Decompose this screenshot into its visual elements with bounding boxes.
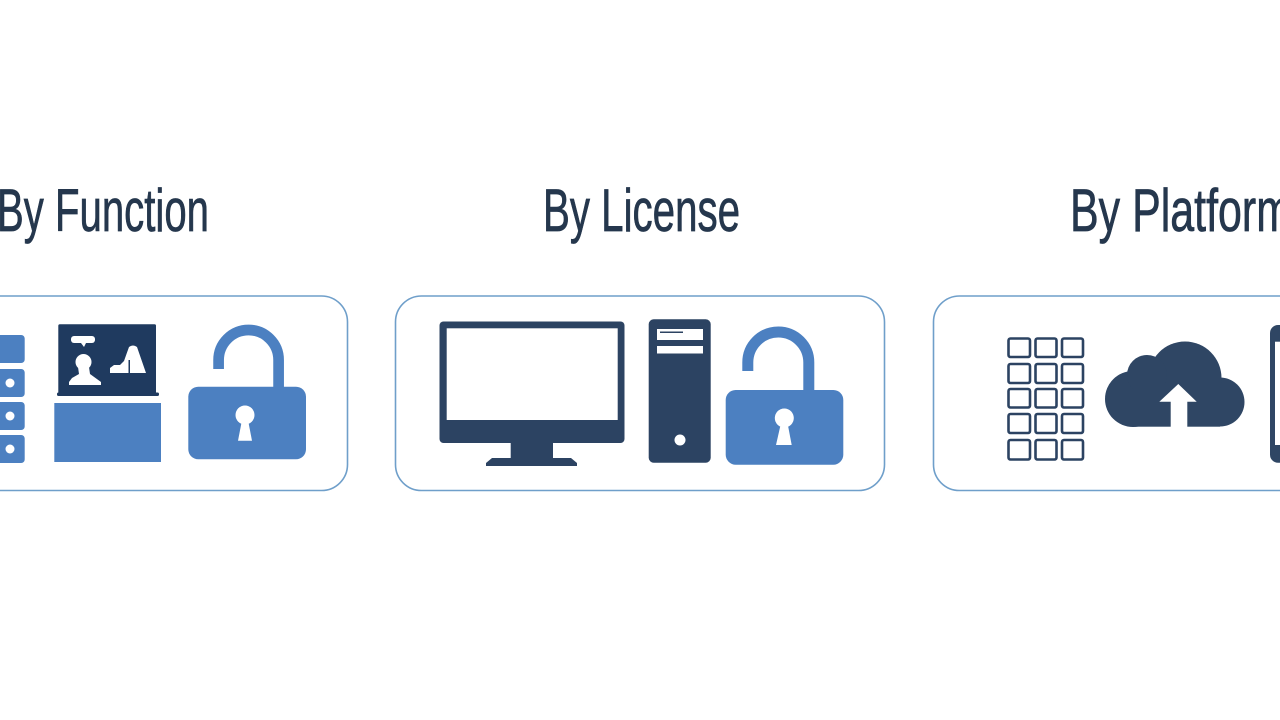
icon: server stack	[0, 335, 25, 463]
heading: By Function: By Function	[0, 177, 209, 244]
panel: by platform	[934, 296, 1280, 490]
panel: by function	[0, 296, 348, 490]
icon: open padlock	[188, 330, 306, 459]
icon: mobile device	[1270, 325, 1280, 463]
heading: By License: By License	[543, 177, 740, 244]
icon: laptop with user	[54, 324, 161, 462]
icon: computer tower	[649, 319, 711, 463]
icon: app grid	[1008, 338, 1083, 460]
icon: cloud upload	[1105, 342, 1244, 428]
icon: desktop monitor	[440, 322, 624, 466]
panel: by license	[396, 296, 884, 490]
icon: open padlock	[726, 332, 843, 465]
